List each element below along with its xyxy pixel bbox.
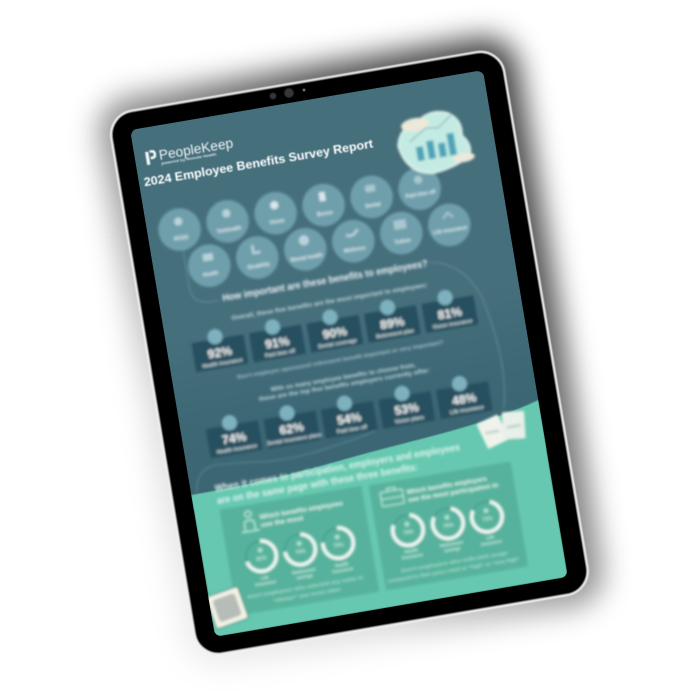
stats row one: [190, 285, 478, 372]
ring 1: Health: [404, 547, 419, 554]
icon: employee: [238, 510, 260, 533]
heading: importance: How important are these benefits to employees?: [222, 259, 429, 304]
icon: briefcase: [380, 486, 404, 507]
circle: benefit 2: [205, 199, 250, 244]
trend line: [406, 114, 455, 142]
circle: benefit 12: [427, 202, 472, 248]
stat: 89%: Retirement plan: [376, 328, 415, 341]
panel background: [219, 486, 379, 616]
ring 3: 73%: [482, 516, 493, 524]
heading: participation line two: are on the same page with these three benefits:: [216, 462, 419, 507]
stat: 74%: Health insurance: [216, 443, 258, 456]
stat: 89%: [362, 295, 421, 343]
stat: 89%: 89%: [379, 314, 406, 332]
circle: benefit 11: [379, 210, 424, 256]
circle: benefit 6: [397, 168, 442, 211]
circle: benefit 7: [187, 243, 232, 288]
blurred content group: [157, 109, 528, 630]
stat: 48%: [434, 371, 493, 419]
ring 2: savings: [444, 545, 461, 553]
circle: benefit 1: 401(k): [173, 234, 189, 243]
stat: 62%: 62%: [279, 420, 305, 438]
tablet shadow: [93, 32, 608, 673]
stats row two: [204, 371, 493, 458]
stat: 62%: Dental insurance plans: [267, 432, 323, 448]
benefit circles bottom row: [185, 200, 474, 290]
text: top five offered line two: these are the top five benefits employers currently offer:: [258, 367, 431, 403]
ring 3: insurance: [481, 538, 503, 547]
panel note: Don't employers who indicated usage: [401, 550, 508, 574]
stat: 54%: Paid time off: [337, 425, 368, 436]
connector line right: [432, 262, 506, 407]
panel: employees use the most: [219, 486, 379, 616]
cloud right: [452, 151, 476, 164]
heading: participation: When it comes to participation, employers and employees: [214, 442, 461, 495]
circle: benefit 10: Wellness: [344, 245, 366, 255]
circle: benefit 9: [283, 227, 328, 272]
ring 1: 81%: [256, 555, 268, 563]
stat: 81%: 81%: [437, 304, 463, 322]
stat: 48%: 48%: [451, 390, 478, 408]
stat: 54%: [319, 391, 378, 439]
stat: 90%: Dental coverage: [318, 338, 358, 350]
circle: benefit 5: [349, 174, 394, 220]
illustration: chart and clouds: [394, 107, 476, 178]
ring 1: 74%: [403, 529, 414, 537]
stat: 62%: [261, 400, 323, 449]
stat: 53%: [377, 381, 435, 429]
circle: benefit 8: Disability: [247, 262, 271, 271]
panel heading line two: use the most: [261, 515, 305, 529]
illustration blob: [394, 107, 473, 178]
stat: 48%: Life insurance: [450, 405, 485, 416]
ring 2: Retirement: [292, 567, 316, 575]
panel: employers participation: [369, 461, 528, 590]
panel heading: Which benefits employees: [259, 500, 344, 521]
stat: 90%: [305, 305, 363, 353]
circle: benefit 7: Health: [203, 270, 219, 279]
cloud left: [400, 116, 430, 134]
stat: 90%: 90%: [322, 324, 348, 342]
circle: benefit 4: Bonus: [317, 210, 334, 218]
stat: 92%: 92%: [207, 343, 233, 361]
stat: 53%: 53%: [394, 400, 420, 418]
ring 1: insurance: [402, 552, 424, 560]
circle: benefit 11: Tuition: [394, 238, 411, 246]
ring 1: [242, 537, 282, 588]
stat: 81%: [420, 285, 478, 333]
stat: 91%: Paid time off: [265, 348, 296, 359]
screen: [126, 70, 568, 638]
text: overall: Overall, these five benefits are the most important to employees:: [231, 282, 428, 322]
ring 3: Health: [335, 561, 349, 568]
logo wordmark: PeopleKeep: [158, 135, 234, 164]
circle: benefit 10: [331, 219, 376, 264]
text: retirement note: Don't employer-sponsored retirement benefit important or very important?: [237, 340, 445, 381]
title: 2024 Employee Benefits Survey Report: [143, 136, 374, 189]
stat: 54%: 54%: [336, 410, 363, 428]
stat: 91%: 91%: [264, 334, 291, 352]
circle: benefit 1: [157, 207, 202, 252]
panel heading line two: see the most participation in: [408, 482, 499, 504]
ring 3: [464, 494, 511, 548]
stat: 74%: 74%: [221, 429, 248, 447]
ring 3: insurance: [332, 566, 354, 574]
panel note line two: "always" use most often: [272, 587, 341, 604]
stat: 81%: Vision insurance: [432, 318, 473, 331]
circle: benefit 3: Vision: [269, 218, 285, 226]
stat: 74%: [204, 410, 263, 458]
tablet: [107, 48, 591, 658]
ring 3: 70%: [333, 542, 345, 550]
ring 2: [425, 501, 472, 555]
circle: benefit 4: [301, 182, 346, 228]
connector line left: [183, 252, 216, 302]
panel background: [369, 461, 528, 590]
ring 2: [280, 529, 322, 582]
mint section background: [185, 400, 568, 637]
circle: benefit 8: [235, 235, 280, 280]
text: top five offered: With so many employee benefits to choose from,: [270, 362, 417, 393]
circle: benefit 2: Telehealth: [216, 225, 242, 235]
circle: benefit 5: Dental: [365, 202, 382, 210]
panel note line two: compared to their peers rated as "high" or "very high": [387, 557, 520, 585]
ring 3: [319, 524, 359, 575]
circle: benefit 12: Life insurance: [433, 225, 468, 237]
logo: [145, 135, 235, 168]
ring 1: [386, 509, 431, 562]
benefit circles top row: [155, 164, 444, 254]
stat: 91%: [247, 315, 306, 362]
bars: [414, 133, 457, 161]
logo mark: [145, 149, 158, 165]
ring 3: Life: [486, 534, 495, 540]
icon: documents: [475, 409, 529, 450]
ring 2: Retirement: [440, 539, 464, 548]
camera module: [270, 88, 305, 99]
tablet body: [107, 48, 591, 658]
ring 1: Life: [260, 574, 270, 581]
circle: benefit 9: Mental health: [290, 253, 323, 264]
panel note: Don't employees who selected any value in: [247, 575, 364, 600]
circle: benefit 6: Paid time off: [405, 189, 436, 200]
logo subline: powered by Remote Health: [161, 152, 217, 166]
stat: 53%: Vision plans: [394, 415, 425, 426]
connector line mint: [192, 431, 381, 493]
qr code card: [205, 585, 250, 630]
circle: benefit 3: [253, 191, 298, 236]
ring 2: 74%: [295, 549, 307, 556]
screen background: [130, 70, 547, 510]
stat: 92%: Health insurance: [202, 357, 243, 370]
stat: 92%: [190, 324, 248, 372]
ring 2: savings: [296, 573, 314, 580]
ring 1: insurance: [255, 579, 277, 587]
ring 2: 76%: [443, 522, 454, 530]
panel heading: Which benefits employers: [406, 476, 488, 496]
